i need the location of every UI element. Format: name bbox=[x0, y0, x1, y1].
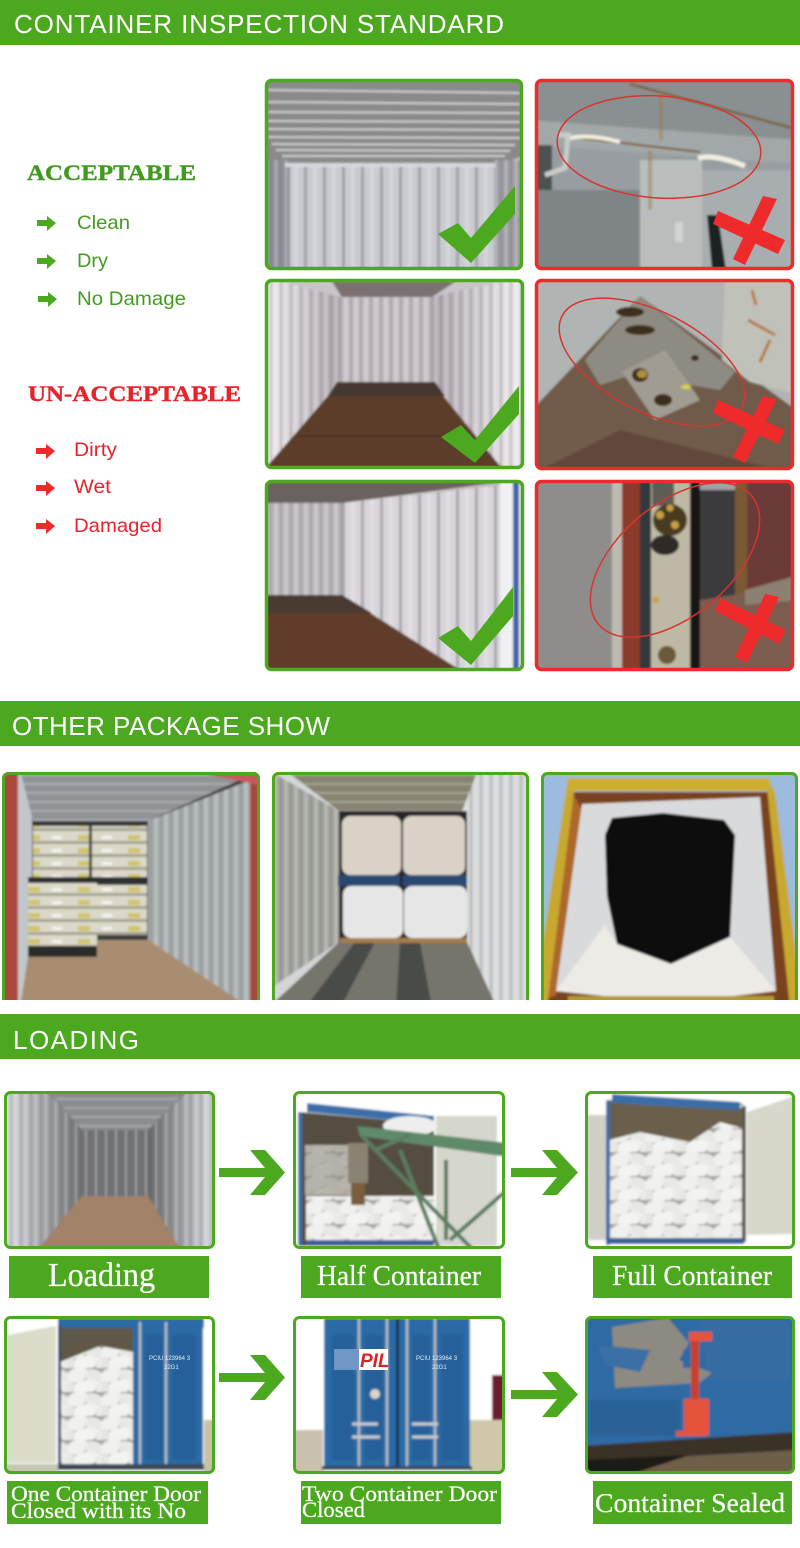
photo: two container doors closed: 22G1 bbox=[432, 1365, 447, 1371]
header: container inspection standard bbox=[0, 0, 800, 45]
header: container inspection standard: CONTAINER INSPECTION STANDARD bbox=[14, 9, 504, 39]
label: half container bbox=[301, 1256, 501, 1298]
icon: green check bbox=[441, 386, 519, 463]
icon: red cross bbox=[715, 594, 786, 663]
photo: one container door closed bbox=[1, 1313, 218, 1478]
arrow: loading to half container bbox=[219, 1150, 285, 1195]
callout: defect ellipse bbox=[539, 272, 765, 452]
header: other package show: OTHER PACKAGE SHOW bbox=[12, 711, 330, 741]
label: loading bbox=[9, 1256, 209, 1298]
photo: two container doors closed bbox=[290, 1313, 508, 1478]
label: loading: Loading bbox=[48, 1257, 155, 1294]
photo: acceptable container 2 bbox=[262, 276, 527, 472]
label: container sealed bbox=[593, 1481, 792, 1524]
label: full container: Full Container bbox=[612, 1261, 773, 1292]
panel: acceptable criteria bbox=[27, 160, 196, 310]
panel: acceptable criteria: ACCEPTABLE bbox=[27, 160, 196, 185]
photo: unacceptable damage 1 bbox=[530, 75, 799, 275]
photo: one container door closed: 22G1 bbox=[164, 1365, 179, 1371]
header: loading bbox=[0, 1014, 800, 1059]
photo: full container bbox=[582, 1088, 798, 1253]
panel: acceptable criteria: Dry bbox=[77, 250, 108, 272]
label: one container door closed bbox=[7, 1481, 208, 1524]
panel: acceptable criteria: No Damage bbox=[77, 288, 186, 310]
label: two container door closed: Closed bbox=[302, 1497, 365, 1522]
label: one container door closed: One Container Door bbox=[11, 1481, 202, 1506]
photo: container liner bag bbox=[538, 770, 800, 1014]
icon: green check bbox=[438, 587, 513, 665]
label: full container bbox=[593, 1256, 792, 1298]
callout: defect ellipse bbox=[554, 89, 764, 205]
icon: red cross bbox=[713, 196, 785, 265]
photo: acceptable container 1 bbox=[260, 75, 528, 275]
callout: defect ellipse bbox=[562, 453, 788, 667]
header: loading: LOADING bbox=[13, 1025, 139, 1055]
photo: acceptable container 3 bbox=[262, 478, 527, 675]
panel: acceptable criteria: Clean bbox=[77, 212, 130, 234]
photo: two container doors closed: PCIU 123964 3 bbox=[416, 1356, 458, 1362]
arrow: one door to two doors closed bbox=[219, 1355, 285, 1400]
photo: unacceptable damage 2 bbox=[530, 272, 799, 475]
photo: big bags in container bbox=[268, 770, 533, 1014]
photo: one container door closed: PCIU 123964 3 bbox=[149, 1356, 191, 1362]
panel: unacceptable criteria: Wet bbox=[74, 476, 112, 498]
icon: green check bbox=[438, 186, 515, 263]
photo: palletised bags in container bbox=[0, 770, 264, 1014]
arrow: doors closed to sealed bbox=[511, 1372, 578, 1417]
photo: empty container loading step bbox=[1, 1088, 218, 1253]
label: two container door closed bbox=[301, 1481, 501, 1524]
label: half container: Half Container bbox=[317, 1261, 482, 1292]
panel: unacceptable criteria: Dirty bbox=[74, 439, 117, 461]
arrow: half to full container bbox=[511, 1150, 578, 1195]
photo: container seal bbox=[582, 1313, 798, 1478]
panel: unacceptable criteria: UN-ACCEPTABLE bbox=[28, 381, 241, 406]
panel: unacceptable criteria bbox=[28, 381, 241, 537]
header: other package show bbox=[0, 701, 800, 746]
icon: red cross bbox=[713, 396, 785, 463]
panel: unacceptable criteria: Damaged bbox=[74, 515, 162, 537]
photo: half container with conveyor bbox=[290, 1088, 508, 1253]
photo: unacceptable damage 3 bbox=[530, 453, 799, 676]
label: two container door closed: Two Container Door bbox=[302, 1481, 498, 1506]
photo: two container doors closed: PIL bbox=[360, 1351, 390, 1372]
label: container sealed: Container Sealed bbox=[595, 1488, 785, 1518]
label: one container door closed: Closed with its No bbox=[11, 1498, 186, 1523]
